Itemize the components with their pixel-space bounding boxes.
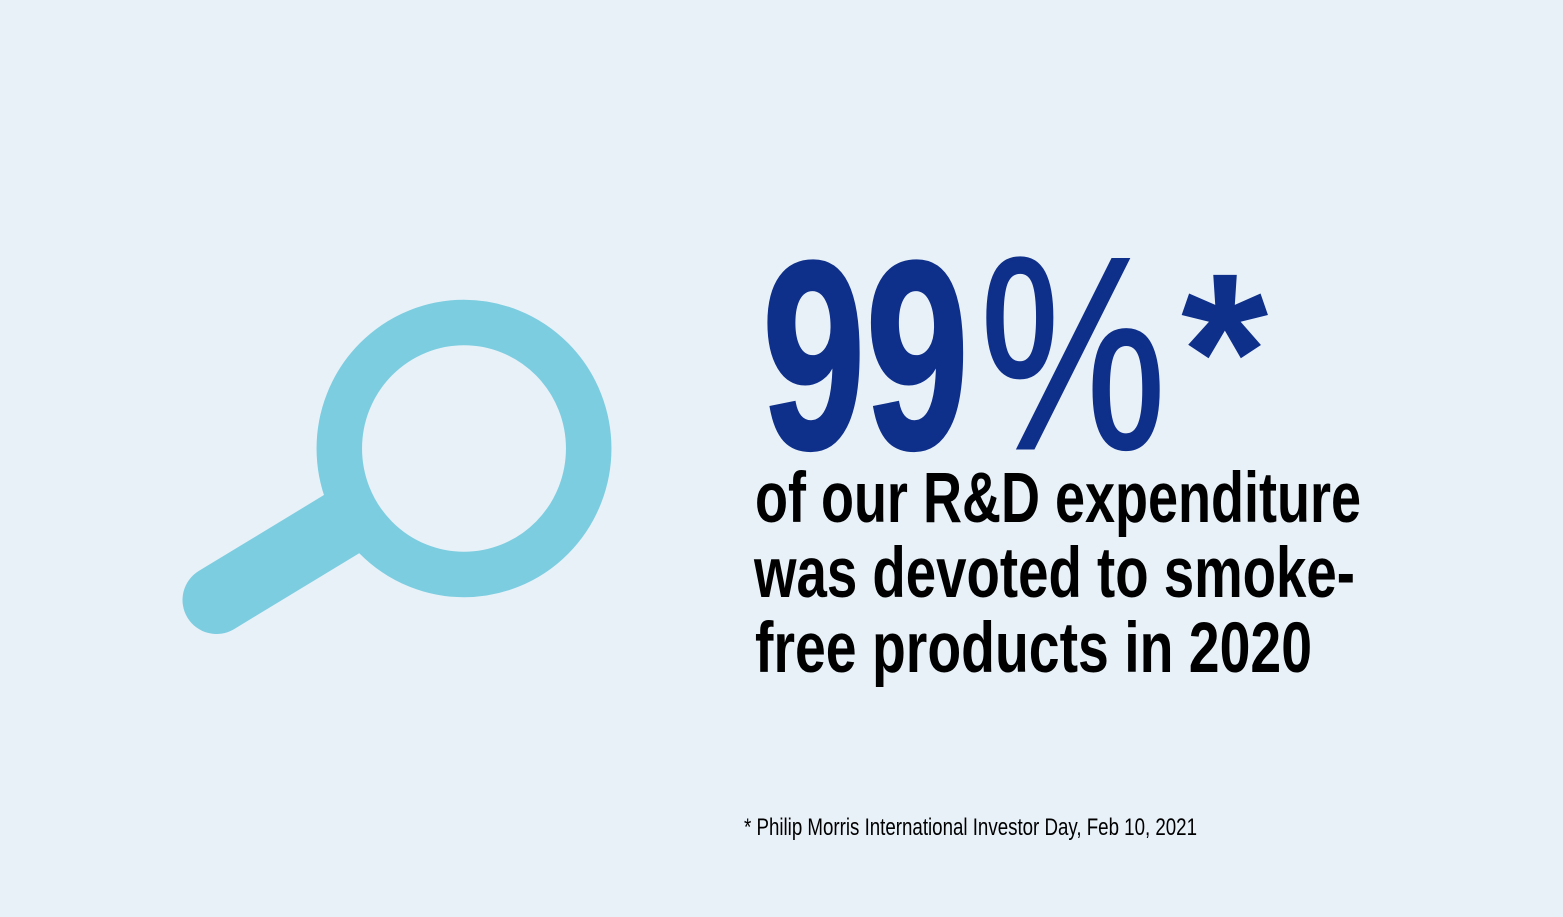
body text: description	[753, 459, 1361, 688]
body text: description: of our R&D expenditure	[755, 459, 1361, 538]
headline statistic: 99%*: %	[980, 201, 1166, 507]
headline statistic: 99%*: 99	[762, 205, 969, 505]
icon: magnifying glass	[216, 322, 589, 600]
headline statistic: 99%*: *	[1181, 227, 1268, 477]
headline statistic: 99%*	[762, 201, 1268, 507]
footnote: source: * Philip Morris International Investor Day, Feb 10, 2021	[744, 814, 1197, 841]
body text: description: free products in 2020	[755, 609, 1312, 688]
body text: description: was devoted to smoke-	[753, 534, 1355, 613]
